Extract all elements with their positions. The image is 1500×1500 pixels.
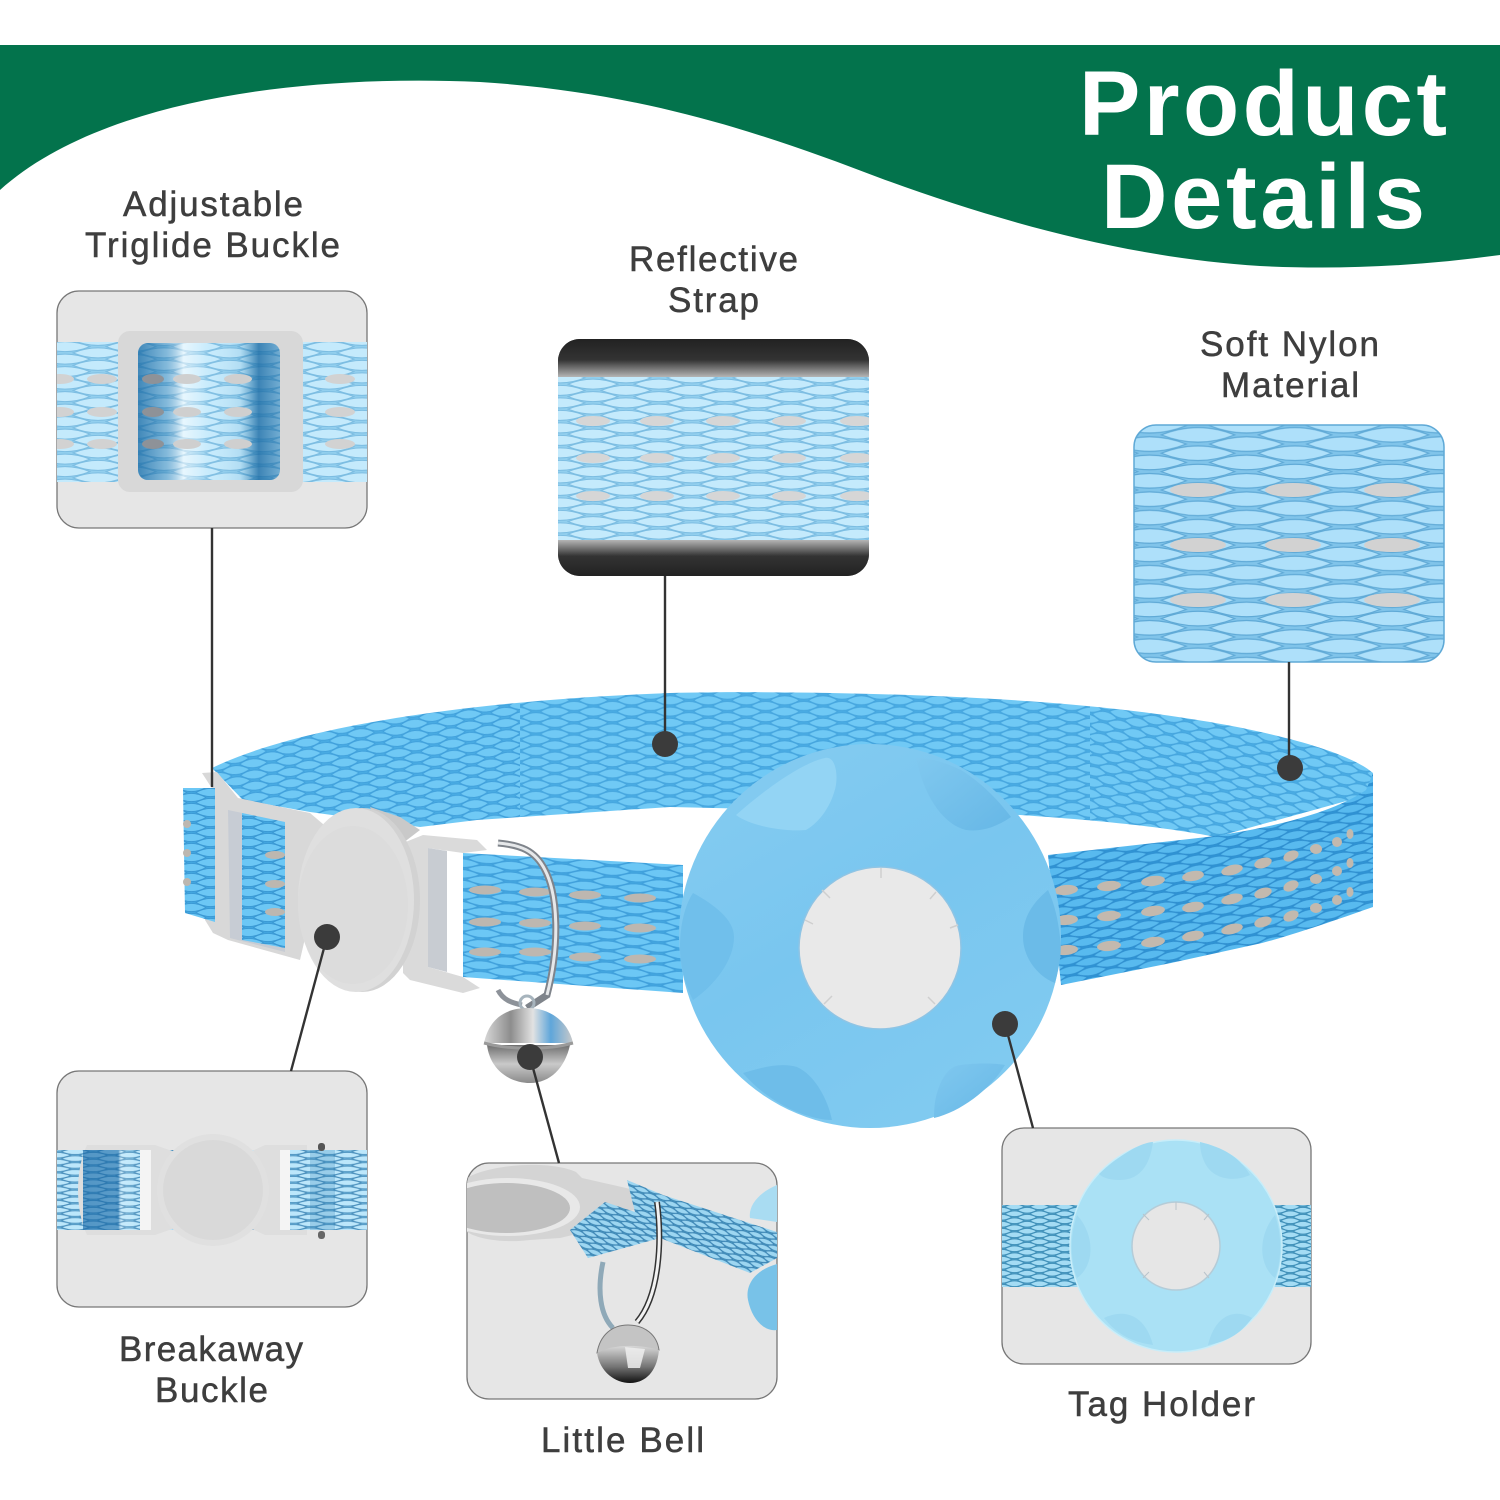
folded nylon strap [570,1180,777,1273]
slider frame [118,331,303,492]
label: Reflective Strap: Reflective [629,240,798,279]
tag holder disc [679,744,1061,1128]
gray clasp [467,1165,635,1241]
panel: breakaway buckle [57,1071,367,1307]
round clasp [172,1150,253,1230]
small ring ends [318,1143,325,1151]
breakaway clasp disc [304,808,420,992]
back strap [213,692,1373,836]
title: Product Details [1079,53,1447,248]
hanging ring [637,1202,659,1322]
reflective thread spots [576,416,874,501]
centre opening [1132,1202,1220,1290]
label: Soft Nylon Material: Material [1221,366,1359,405]
holder centre window [799,867,961,1029]
collar illustration [183,680,1380,1128]
breakaway buckle: triglide frame [202,772,330,960]
breakaway buckle: right frame [403,835,487,993]
panel: soft nylon material [1134,425,1444,662]
reflective dashes, right [1054,829,1354,956]
label: Adjustable Triglide Buckle: Adjustable [123,185,303,224]
bell [484,1008,573,1043]
label: Reflective Strap [629,240,798,320]
panel: reflective strap [558,339,874,576]
callout dots [314,731,1303,1070]
strap through triglide [242,813,285,948]
label: Adjustable Triglide Buckle [85,185,340,265]
connector lines [212,528,1289,1163]
label: Adjustable Triglide Buckle: Triglide Buckle [85,226,340,265]
label: Breakaway Buckle [119,1330,304,1410]
label: Little Bell: Little Bell [541,1421,704,1460]
label: Soft Nylon Material: Soft Nylon [1200,325,1379,364]
green header banner [0,45,1500,268]
metal ring [498,843,556,1008]
label: Breakaway Buckle: Breakaway [119,1330,304,1369]
panel: tag holder [1002,1128,1311,1364]
reflective dashes, left [469,886,656,964]
title: Product Details: Product [1079,53,1447,155]
front-left strap [463,853,683,993]
label: Breakaway Buckle: Buckle [155,1371,268,1410]
light-blue tag holder edges [750,1185,777,1222]
label: Soft Nylon Material [1200,325,1379,405]
bell [597,1325,659,1353]
buckle frames [78,1150,280,1230]
front-right strap [1048,773,1373,985]
strap behind slider [57,342,367,482]
label: Reflective Strap: Strap [668,281,759,320]
title: Product Details: Details [1101,146,1425,248]
panel: adjustable triglide buckle [46,291,367,528]
label: Tag Holder: Tag Holder [1068,1385,1255,1424]
holder ribs [680,758,1061,1120]
panel: little bell [436,1163,777,1399]
holder ribs [1072,1142,1280,1345]
